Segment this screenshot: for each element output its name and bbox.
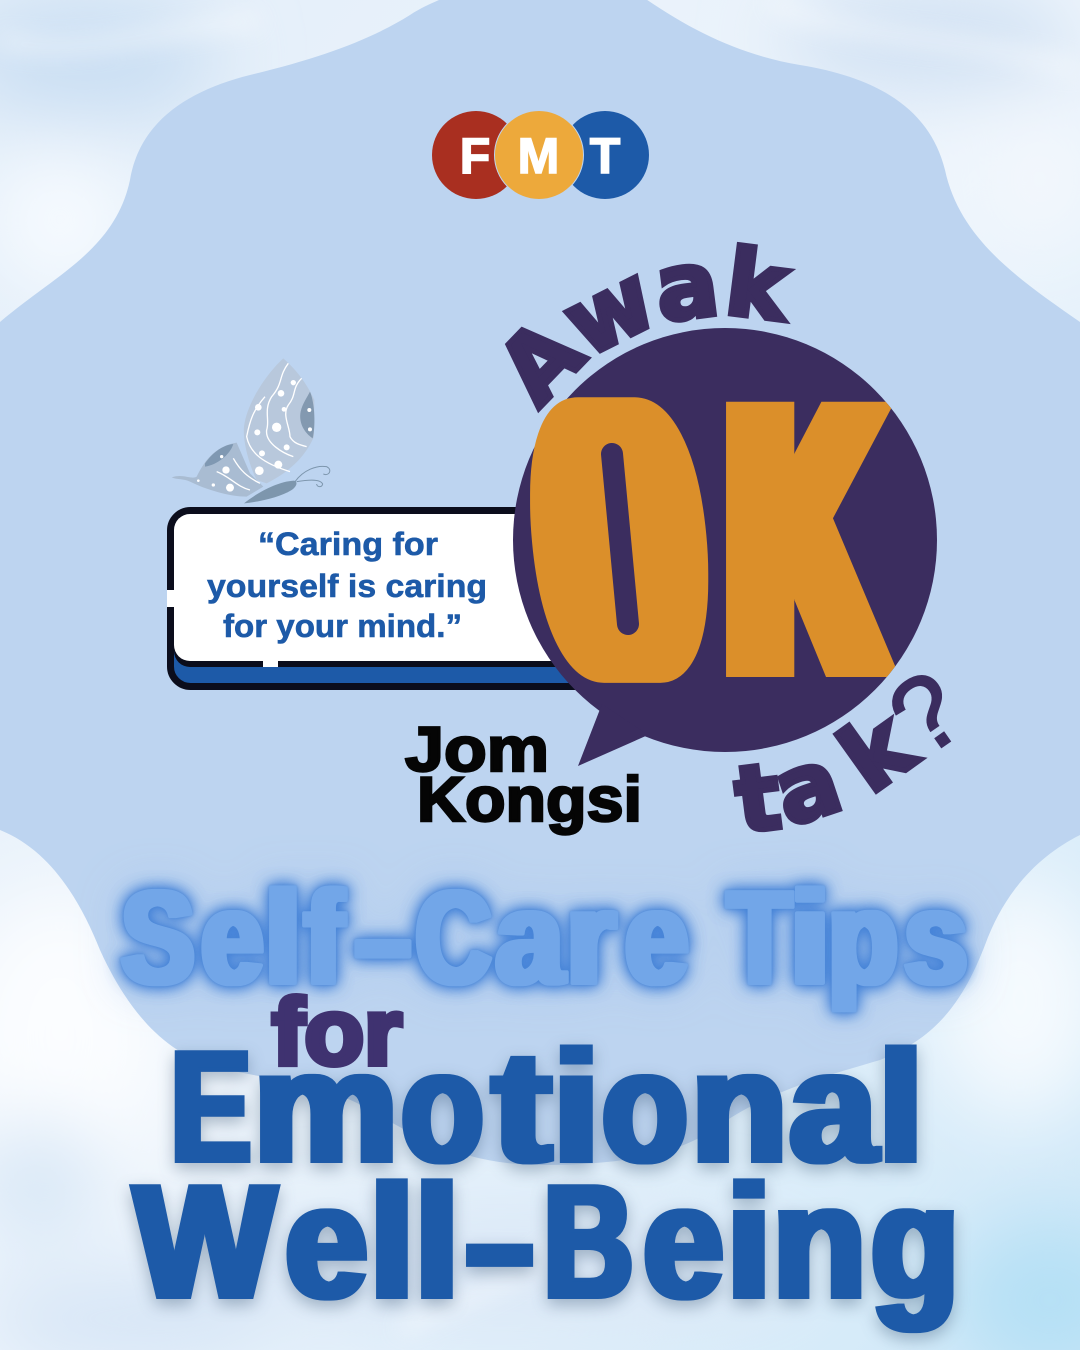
heading: Emotional: o bbox=[402, 1019, 483, 1195]
icon: butterfly bbox=[172, 358, 330, 503]
heading: Emotional: l bbox=[879, 1019, 923, 1195]
Jom Kongsi label: Jom bbox=[405, 715, 549, 785]
heading: Emotional: a bbox=[790, 1019, 878, 1195]
heading: Well-Being: - bbox=[463, 1152, 536, 1332]
heading: for: for bbox=[272, 979, 402, 1084]
heading: Well-Being: l bbox=[415, 1152, 459, 1332]
logo circle: T bbox=[561, 111, 649, 199]
heading: Emotional: n bbox=[692, 1019, 787, 1195]
heading: Self-Care Tips: i bbox=[790, 864, 830, 1011]
heading: Emotional: i bbox=[553, 1019, 599, 1195]
logo circle: F: F bbox=[460, 128, 490, 184]
heading: Self-Care Tips: e bbox=[202, 864, 263, 1011]
quote text: “Caring for bbox=[258, 526, 438, 562]
Jom Kongsi label: Kongsi bbox=[417, 765, 642, 835]
heading: Self-Care Tips: S bbox=[122, 864, 194, 1011]
heading: Self-Care Tips: r bbox=[567, 864, 615, 1011]
OK letter O: O bbox=[533, 321, 706, 759]
Jom Kongsi label bbox=[405, 715, 642, 835]
curved text: tak?: ? bbox=[869, 648, 984, 779]
logo circle: M: M bbox=[518, 128, 559, 184]
FMT logo bbox=[432, 110, 649, 200]
heading: Emotional: t bbox=[492, 1019, 551, 1195]
curved text: tak?: tak bbox=[729, 691, 933, 855]
logo circle: M bbox=[494, 110, 584, 200]
heading: Self-Care Tips: a bbox=[496, 864, 565, 1011]
heading: Well-Being: e bbox=[286, 1152, 367, 1332]
heading: Well-Being: B bbox=[544, 1152, 633, 1332]
heading: Well-Being: n bbox=[773, 1152, 866, 1332]
speech bubble with OK bbox=[513, 315, 937, 766]
heading: Well-Being: l bbox=[370, 1152, 414, 1332]
heading: Self-Care Tips: p bbox=[828, 864, 898, 1011]
OK letter K: K bbox=[731, 315, 883, 762]
heading: Well-Being: W bbox=[134, 1152, 276, 1332]
heading: Well-Being: i bbox=[727, 1152, 771, 1332]
quote text: for your mind.” bbox=[223, 608, 462, 644]
logo circle: F bbox=[432, 111, 520, 199]
callout box with quote bbox=[167, 510, 650, 686]
quote text: yourself is caring bbox=[207, 568, 487, 604]
curved text: Awak: Awak bbox=[477, 229, 796, 424]
heading: Emotional: m bbox=[254, 1019, 398, 1195]
heading: Self-Care Tips: e bbox=[626, 864, 688, 1011]
heading: Self-Care Tips: f bbox=[305, 864, 344, 1011]
O inner counter bbox=[612, 454, 628, 624]
heading: Emotional: o bbox=[602, 1019, 687, 1195]
butterfly body and antennae bbox=[244, 466, 330, 503]
heading: Emotional: E bbox=[171, 1019, 251, 1195]
heading: Self-Care Tips: s bbox=[905, 864, 967, 1011]
heading: Self-Care Tips: l bbox=[265, 864, 301, 1011]
bubble circle and tail bbox=[513, 328, 937, 766]
heading: Well-Being: e bbox=[644, 1152, 723, 1332]
heading: Self-Care Tips: T bbox=[728, 864, 791, 1011]
heading: Well-Being: g bbox=[871, 1152, 959, 1332]
heading: Self-Care Tips: - bbox=[353, 864, 413, 1011]
heading: Self-Care Tips: C bbox=[416, 864, 491, 1011]
logo circle: T: T bbox=[590, 128, 620, 184]
